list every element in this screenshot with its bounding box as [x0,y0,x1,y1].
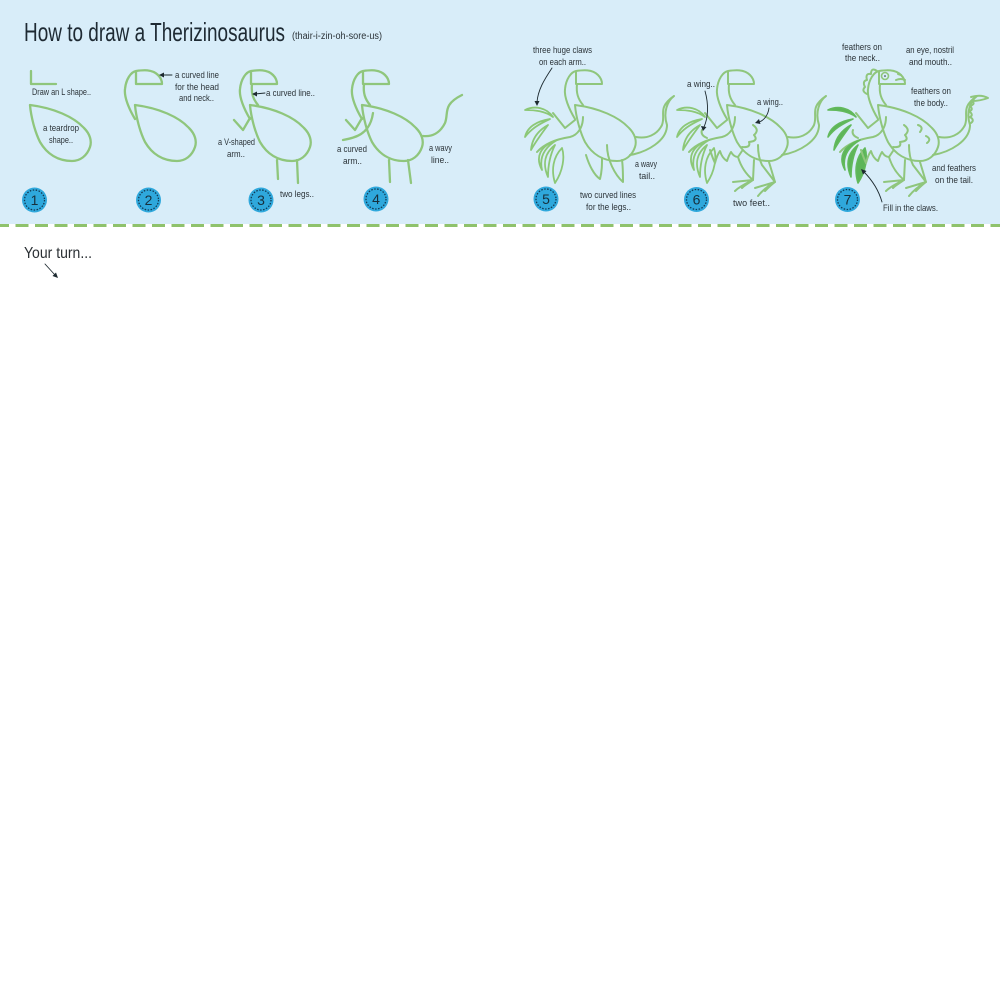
step 2 [125,70,219,212]
step 7 [828,42,988,214]
step 5 labels: on each arm.. [539,57,586,68]
badge 2 [136,188,161,212]
finished dinosaur [828,70,988,196]
dinosaur outline [125,70,196,161]
step 6 labels: a wing.. [757,97,783,108]
step 3 labels: a curved line.. [266,88,315,99]
step 7 labels: Fill in the claws. [883,203,938,214]
step 5 labels: for the legs.. [586,202,631,213]
badge 5: 5 [542,191,550,207]
badge 2: 2 [145,192,153,208]
step 5 [525,45,674,213]
step 2 labels: and neck.. [179,93,214,104]
step 1 labels: shape.. [49,135,73,146]
step 4 labels [337,143,452,167]
step 3 labels [218,88,315,200]
step 6 [677,70,826,212]
arrow to claws [861,169,882,202]
L shape [31,71,56,84]
dinosaur outline [525,70,674,183]
arrow to neck [252,92,265,96]
step 3 labels: two legs.. [280,189,314,200]
badge 1 [22,188,47,212]
badge 7 [835,187,860,212]
badge 3 [248,188,274,212]
badge 1: 1 [31,192,39,208]
step 1 labels [32,87,91,146]
step 2 labels: for the head [175,82,219,93]
step 5 labels: tail.. [639,171,655,182]
badge 4 [364,186,388,212]
step 4 labels: a wavy [429,143,452,154]
step 7 labels: feathers on [911,86,951,97]
step 4 labels: a curved [337,144,367,155]
dinosaur outline [234,70,311,183]
step 3 [218,70,315,212]
arrow to head [159,72,172,78]
step 7 labels: an eye, nostril [906,45,954,56]
step 4 labels: line.. [431,155,449,166]
dinosaur outline [343,70,462,183]
pronunciation: (thair-i-zin-oh-sore-us) [292,31,382,42]
dinosaur outline [677,70,826,196]
step 3 labels: a V-shaped [218,137,255,148]
arrow down [45,264,58,278]
step 6 labels: a wing.. [687,79,715,90]
step 5 labels: a wavy [635,159,657,170]
badge 6: 6 [693,192,701,208]
step 5 labels [533,45,657,213]
step 7 labels: the body.. [914,98,948,109]
step 1 labels: a teardrop [43,123,79,134]
step 6 labels: two feet.. [733,198,770,208]
step 7 labels: on the tail. [935,175,973,186]
step 6 labels [687,79,783,208]
step 2 labels: a curved line [175,70,219,81]
badge 3: 3 [257,192,265,208]
title: How to draw a Therizinosaurus [24,17,285,47]
arrows to wings [701,91,769,131]
step 4 labels: arm.. [343,156,362,167]
step 7 labels: feathers on [842,42,882,53]
badge 6 [684,187,709,212]
step 7 labels: and feathers [932,163,976,174]
step 1 labels: Draw an L shape.. [32,87,91,98]
step 1 [22,71,91,212]
badge 7: 7 [844,192,852,208]
panel: instruction background [0,0,1000,224]
step 3 labels: arm.. [227,149,245,160]
teardrop body [30,105,91,161]
step 4 [337,70,462,211]
badge 5 [534,186,558,212]
step 7 labels: the neck.. [845,53,880,64]
step 7 labels [842,42,976,214]
step 2 labels [175,70,219,104]
your turn prompt: Your turn... [24,245,92,262]
step 7 labels: and mouth.. [909,57,952,68]
arrow to claws [534,68,552,106]
step 5 labels: three huge claws [533,45,592,56]
badge 4: 4 [372,191,380,207]
step 5 labels: two curved lines [580,190,636,201]
